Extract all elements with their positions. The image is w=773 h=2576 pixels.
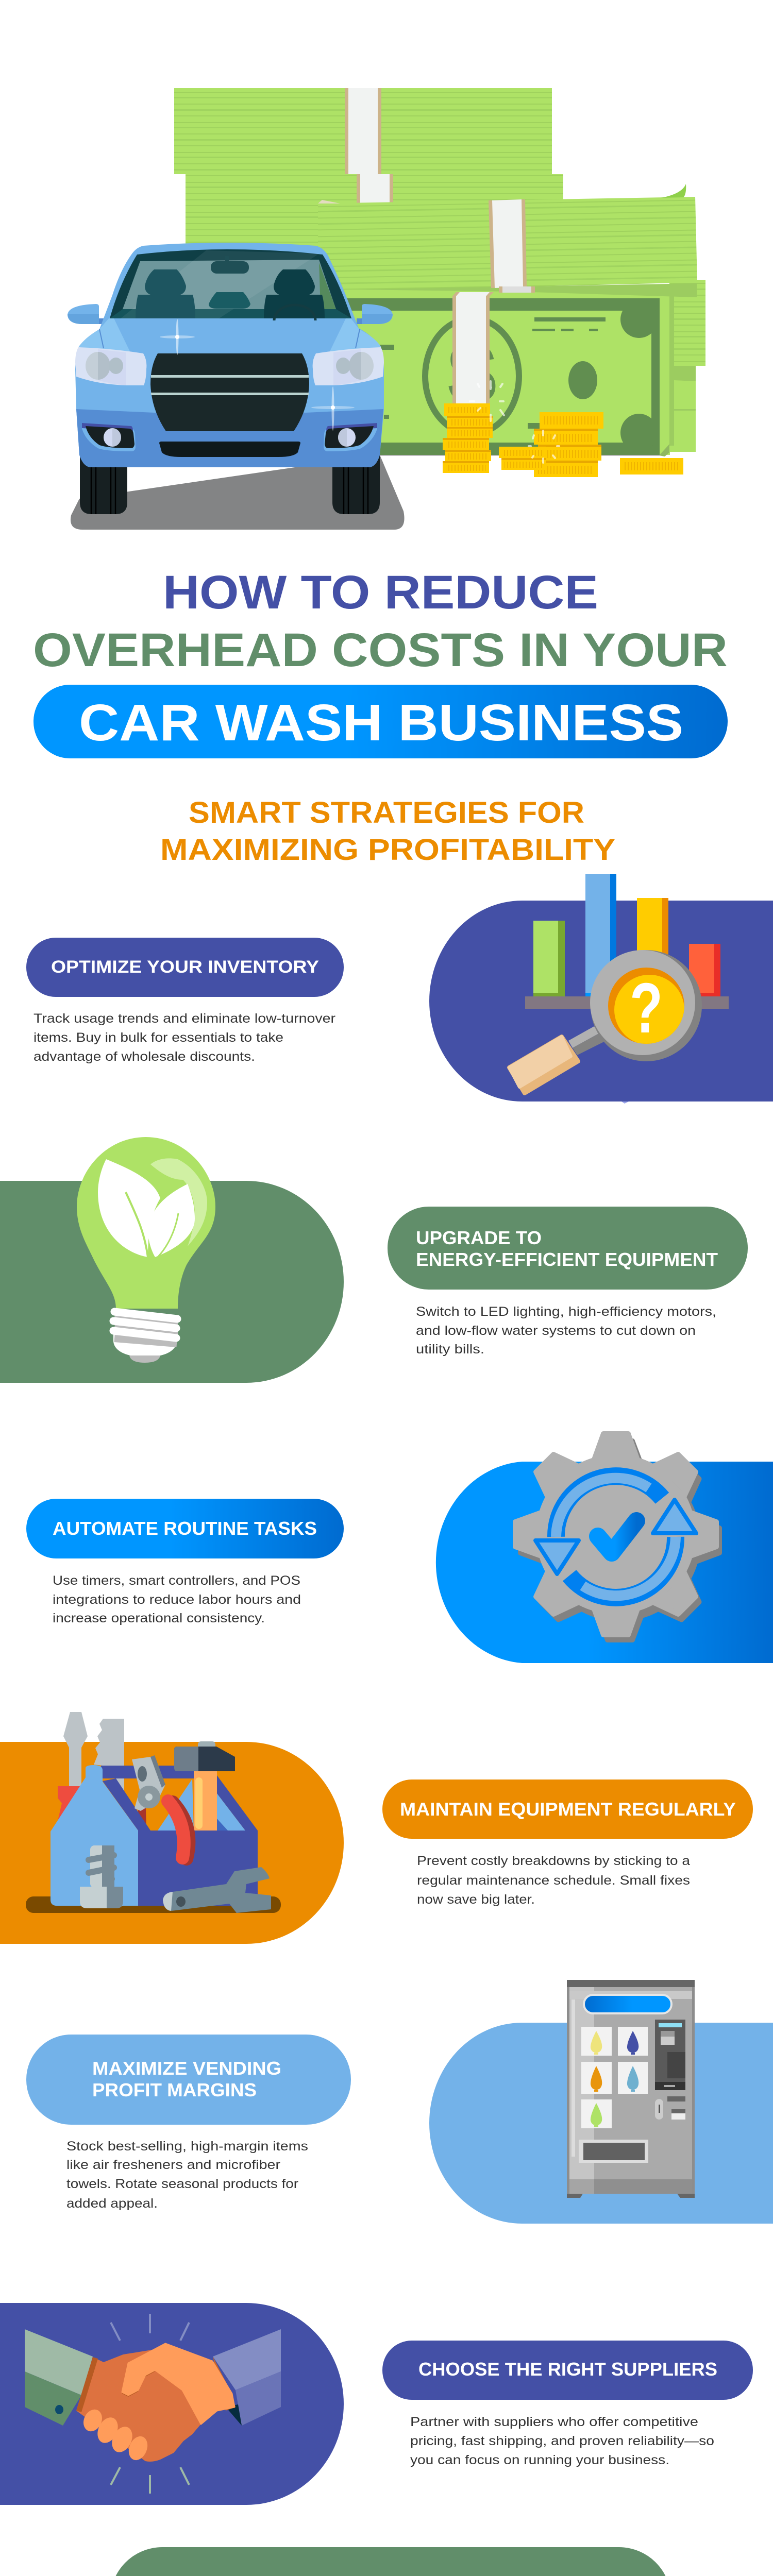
body text: Partner with suppliers who offer competitive <box>410 2415 698 2429</box>
body text: you can focus on running your business. <box>410 2453 669 2467</box>
title pill text: CAR WASH BUSINESS <box>79 694 683 752</box>
body text: regular maintenance schedule. Small fixes <box>417 1873 690 1888</box>
heading <box>92 2058 281 2100</box>
panel: right suppliers <box>0 2303 753 2505</box>
wrench <box>163 1867 271 1913</box>
side mirrors <box>68 304 393 324</box>
subtitle: MAXIMIZING PROFITABILITY <box>160 833 615 867</box>
vertical bill band <box>452 292 494 403</box>
car <box>68 243 393 514</box>
icon: toolbox <box>26 1712 281 1913</box>
fog lights <box>82 423 377 451</box>
heading pill <box>382 1780 753 1839</box>
heading pill <box>382 2341 753 2400</box>
panel: energy-efficient equipment <box>0 1137 748 1383</box>
title <box>33 566 728 758</box>
money stacks <box>174 88 563 249</box>
car body <box>75 243 384 467</box>
panel: automate routine tasks <box>26 1434 773 1663</box>
icon: bar chart and magnifier <box>509 874 729 1104</box>
lower bumper <box>76 409 383 467</box>
body text <box>66 2139 308 2211</box>
heading pill <box>388 1207 748 1290</box>
heading <box>416 1227 718 1270</box>
icon: bar chart and magnifier: ? <box>630 969 663 1048</box>
body text: advantage of wholesale discounts. <box>33 1049 255 1064</box>
icon background panel <box>0 1742 344 1944</box>
body text: Switch to LED lighting, high-efficiency motors, <box>416 1304 716 1319</box>
sparkles <box>160 319 355 431</box>
panel: optimize inventory <box>26 874 773 1104</box>
icon: light bulb with leaves <box>77 1137 215 1363</box>
body text: items. Buy in bulk for essentials to take <box>33 1030 283 1045</box>
body text: Stock best-selling, high-margin items <box>66 2139 308 2154</box>
windshield <box>110 249 351 320</box>
title pill <box>33 685 728 758</box>
body text: towels. Rotate seasonal products for <box>66 2177 298 2191</box>
rays <box>111 2314 189 2494</box>
icon: handshake <box>25 2314 281 2494</box>
subtitle: SMART STRATEGIES FOR <box>189 796 584 829</box>
icon background panel <box>0 2303 344 2505</box>
body text: Use timers, smart controllers, and POS <box>53 1573 300 1588</box>
gold coins <box>443 403 683 477</box>
body text <box>416 1304 716 1357</box>
panel: maintain equipment <box>0 1712 753 1944</box>
body text: like air fresheners and microfiber <box>66 2158 280 2172</box>
headlights <box>75 347 384 385</box>
body text <box>417 1854 690 1907</box>
heading: MAXIMIZE VENDING <box>92 2058 281 2079</box>
body text: utility bills. <box>416 1342 484 1357</box>
body text: added appeal. <box>66 2196 158 2211</box>
hero illustration: car and money <box>68 88 705 530</box>
heading: CHOOSE THE RIGHT SUPPLIERS <box>418 2359 717 2380</box>
body text <box>53 1573 301 1625</box>
body text: Prevent costly breakdowns by sticking to a <box>417 1854 690 1868</box>
heading: MAINTAIN EQUIPMENT REGULARLY <box>400 1799 736 1820</box>
dollar bill <box>309 280 705 456</box>
body text: and low-flow water systems to cut down on <box>416 1324 696 1338</box>
body text: integrations to reduce labor hours and <box>53 1592 301 1607</box>
top rotated money stack <box>318 184 697 297</box>
body text: Track usage trends and eliminate low-turnover <box>33 1011 335 1026</box>
heading: PROFIT MARGINS <box>92 2079 257 2100</box>
heading: OPTIMIZE YOUR INVENTORY <box>51 957 319 977</box>
grille <box>150 353 309 457</box>
car shadow <box>71 455 405 530</box>
body text: now save big later. <box>417 1892 535 1907</box>
title line 1: HOW TO REDUCE <box>163 566 598 619</box>
body text: pricing, fast shipping, and proven reliability—so <box>410 2434 714 2448</box>
heading pill <box>26 2035 351 2125</box>
heading: AUTOMATE ROUTINE TASKS <box>53 1518 317 1539</box>
heading: ENERGY-EFFICIENT EQUIPMENT <box>416 1249 718 1270</box>
icon: vending machine <box>567 1980 695 2198</box>
coin sparkles <box>470 381 559 463</box>
icon background panel <box>0 1181 344 1383</box>
cycle arrows <box>535 1476 696 1598</box>
body text <box>410 2415 714 2467</box>
cta pill <box>110 2547 671 2576</box>
panel: vending profit margins <box>26 1980 773 2224</box>
subtitle <box>160 796 615 867</box>
call to action <box>110 2547 671 2576</box>
dollar bill: $ <box>447 324 497 423</box>
heading pill <box>26 1499 344 1558</box>
heading: UPGRADE TO <box>416 1227 542 1248</box>
icon: gear with check mark <box>515 1434 719 1640</box>
icon background panel <box>429 901 773 1101</box>
hood highlights <box>78 318 381 352</box>
icon background panel <box>436 1462 773 1663</box>
tires <box>80 455 380 514</box>
title line 2: OVERHEAD COSTS IN YOUR <box>33 624 728 676</box>
heading pill <box>26 938 344 997</box>
icon background panel <box>429 2023 773 2224</box>
body text <box>33 1011 335 1064</box>
body text: increase operational consistency. <box>53 1611 265 1625</box>
